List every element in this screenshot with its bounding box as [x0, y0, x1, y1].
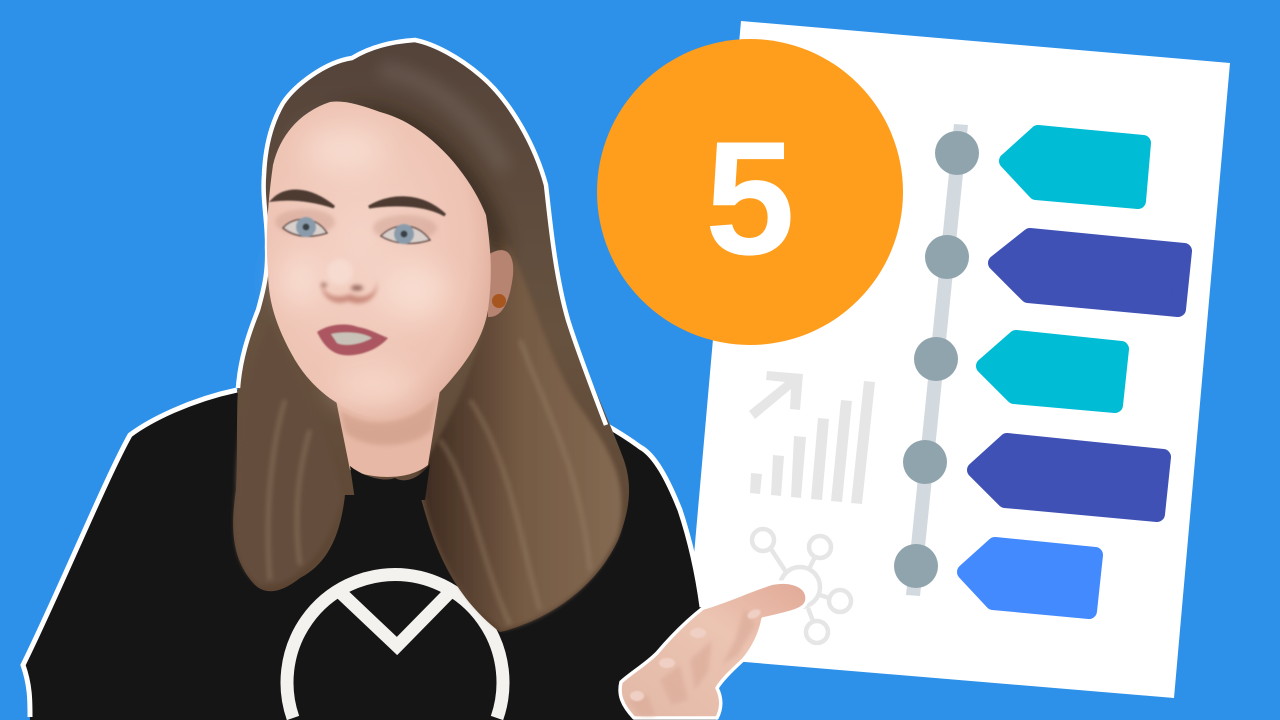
- earring: [492, 294, 506, 308]
- left eye: [283, 217, 327, 237]
- badge: orange circle with number: 5: [705, 108, 795, 289]
- hand: [620, 582, 807, 718]
- panel: tilted infographic page: [685, 21, 1230, 698]
- collar: [350, 464, 430, 500]
- nose: [321, 259, 377, 303]
- face: [267, 102, 491, 418]
- left eye socket shading: [275, 209, 335, 235]
- timeline tag 1: [1007, 133, 1143, 201]
- chart: rising bars: [750, 381, 875, 504]
- neck shadow: [340, 395, 438, 445]
- timeline axis: [906, 124, 968, 596]
- shirt outline right: [606, 425, 702, 607]
- right eye: [381, 224, 430, 244]
- timeline nodes: [894, 131, 979, 588]
- timeline tag 5: [965, 545, 1095, 611]
- shirt logo: [287, 575, 503, 718]
- timeline tag 4: [975, 441, 1163, 514]
- mouth: [317, 324, 388, 355]
- icon: network hub: [752, 529, 851, 643]
- nails: [630, 607, 762, 701]
- badge: orange circle with number: [597, 39, 903, 345]
- shirt: [23, 390, 717, 720]
- cheek highlights: [280, 128, 447, 403]
- hair outline: [238, 40, 606, 425]
- left eyebrow: [273, 191, 334, 207]
- timeline tag 2: [996, 236, 1184, 309]
- fingers: [628, 608, 755, 716]
- icon: growth arrow: [749, 371, 803, 419]
- hair: [233, 40, 629, 632]
- person presenter: [23, 40, 807, 720]
- neck: [335, 390, 440, 477]
- right eye socket shading: [373, 215, 437, 241]
- ear: [488, 250, 513, 317]
- shirt outline left: [23, 390, 237, 717]
- timeline tag 3: [984, 338, 1121, 405]
- right eyebrow: [369, 198, 445, 215]
